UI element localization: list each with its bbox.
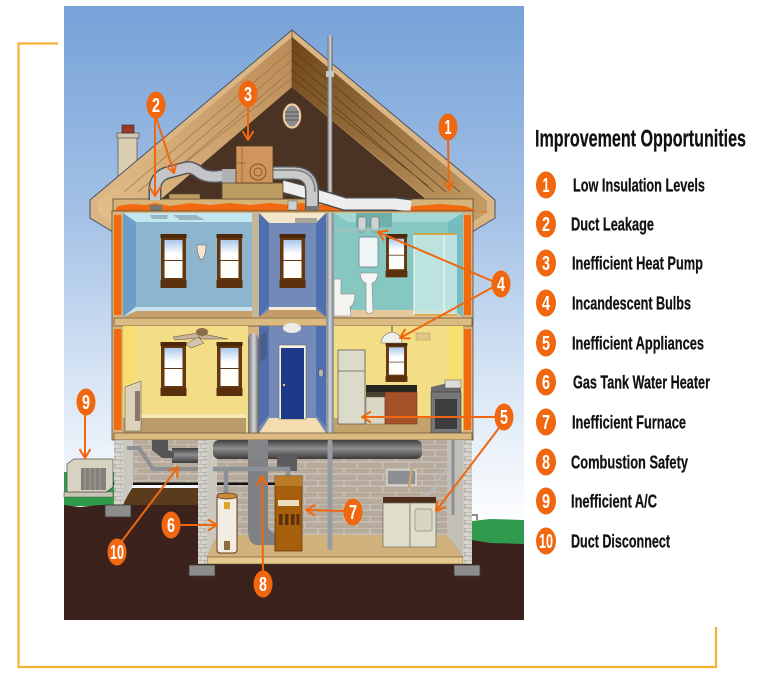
room: upstairs bedroom (123, 213, 252, 317)
legend item 10 (536, 528, 670, 554)
badge 3 (238, 80, 258, 108)
toilet (334, 279, 355, 316)
roof (90, 30, 495, 232)
legend item 4 (536, 290, 691, 316)
legend item 7: 7 (542, 412, 550, 434)
badge 2: 2 (152, 95, 160, 117)
water heater (217, 493, 237, 553)
chimney (117, 125, 139, 180)
legend item 5: Inefficient Appliances (572, 332, 704, 354)
wall heater (125, 381, 141, 431)
room: bathroom (334, 213, 463, 317)
ceiling lamp (381, 326, 402, 343)
badge 10 (108, 538, 126, 566)
ceiling fan (173, 328, 228, 348)
wall insulation strips (114, 215, 471, 430)
legend item 9: 9 (542, 491, 550, 513)
legend item 10: 10 (539, 531, 553, 553)
arrow 9 (84, 414, 86, 458)
badge 2 (146, 92, 166, 118)
mirror (359, 237, 378, 267)
floor band above basement (114, 433, 472, 440)
outdoor spigot (472, 515, 477, 520)
room: living room (123, 326, 248, 433)
A/C condenser (64, 459, 113, 497)
room: downstairs hallway (259, 323, 326, 433)
basement main duct (127, 440, 422, 545)
badge 9: 9 (82, 392, 90, 414)
kitchen window (386, 343, 407, 382)
badge 5: 5 (500, 407, 508, 429)
legend item 8 (536, 448, 688, 476)
chase with ductwork (248, 333, 259, 433)
basement floor (207, 535, 463, 564)
legend item 2: Duct Leakage (571, 214, 654, 234)
recessed bulbs (358, 217, 379, 232)
legend item 4: 4 (542, 293, 551, 315)
legend item 2 (536, 210, 654, 238)
flue pipe (213, 469, 288, 497)
legend panel (535, 126, 746, 554)
basement back wall (207, 440, 448, 536)
legend item 3 (536, 250, 703, 276)
floor band between storeys (114, 318, 472, 326)
badge 4 (492, 270, 510, 298)
ground: soil and grass (64, 472, 524, 620)
front door (279, 345, 306, 419)
wall sconce (197, 245, 206, 260)
badge 9 (76, 388, 96, 416)
legend item 1 (536, 172, 705, 198)
legend item 9 (536, 488, 657, 514)
footings (105, 505, 480, 576)
furnace (275, 476, 302, 551)
badge 7 (344, 498, 362, 526)
arrow 8 (262, 476, 263, 572)
legend item 7: Inefficient Furnace (572, 412, 686, 432)
attic floor (113, 199, 473, 211)
vent pipe through the roof and attic (326, 35, 334, 200)
room: kitchen (334, 326, 463, 433)
legend item 7 (536, 408, 686, 436)
arrow 6 (180, 524, 217, 526)
legend item 2: 2 (542, 214, 550, 236)
wall stud between rooms (252, 213, 334, 433)
legend item 8: Combustion Safety (571, 452, 688, 472)
arrow 5b (436, 428, 499, 511)
house illustration panel (64, 6, 524, 620)
badge 3: 3 (244, 84, 252, 106)
badge 1 (438, 114, 458, 140)
badge 1: 1 (444, 117, 452, 139)
basement side walls and piers (198, 440, 472, 564)
arrow 2a (154, 117, 156, 196)
basement vent pipe (328, 440, 332, 550)
arrow 4a (378, 232, 497, 283)
attic back wall (160, 87, 427, 200)
callout badges (76, 80, 514, 598)
legend item 1: 1 (542, 175, 550, 197)
badge 8 (254, 570, 272, 598)
room: upstairs hallway (259, 213, 326, 317)
legend item 5: 5 (542, 333, 550, 355)
arrow 1 (448, 138, 449, 190)
legend item 6 (536, 368, 710, 396)
sky background (64, 6, 524, 620)
legend item 8: 8 (542, 452, 550, 474)
refrigerator (338, 350, 365, 424)
badge 7: 7 (349, 502, 357, 524)
badge 6: 6 (167, 515, 175, 537)
arrow 2b (156, 117, 174, 173)
legend item 3: Inefficient Heat Pump (572, 252, 703, 274)
basement black pipe (215, 482, 275, 485)
arrow 3 (247, 106, 249, 140)
badge 8: 8 (259, 574, 267, 596)
basement crawl space (110, 440, 198, 505)
attic round vent (282, 103, 302, 129)
legend item 4: Incandescent Bulbs (572, 292, 691, 314)
window and fixtures on basement wall (387, 440, 453, 515)
attic ducts (150, 168, 411, 211)
badge 6 (162, 512, 180, 538)
attic insulation (115, 203, 487, 213)
legend item 3: 3 (542, 253, 550, 275)
house wall body (112, 211, 473, 440)
stove (431, 380, 461, 433)
legend item 5 (536, 330, 704, 356)
arrow 7 (306, 510, 345, 511)
washer and dryer (383, 497, 436, 547)
heat pump unit (169, 146, 283, 199)
legend item 9: Inefficient A/C (571, 490, 657, 512)
badge 10: 10 (110, 542, 124, 564)
arrow 4b (400, 285, 497, 338)
legend item 10: Duct Disconnect (571, 530, 670, 552)
sink (360, 273, 378, 314)
arrow 10 (122, 467, 178, 541)
callout arrows (85, 106, 499, 572)
badge 4: 4 (497, 274, 506, 296)
kitchen counter and cabinets (366, 385, 417, 424)
badge 5 (494, 404, 514, 430)
legend item 6: 6 (542, 372, 550, 394)
shower enclosure (414, 234, 457, 315)
arrow 5a (362, 416, 496, 418)
